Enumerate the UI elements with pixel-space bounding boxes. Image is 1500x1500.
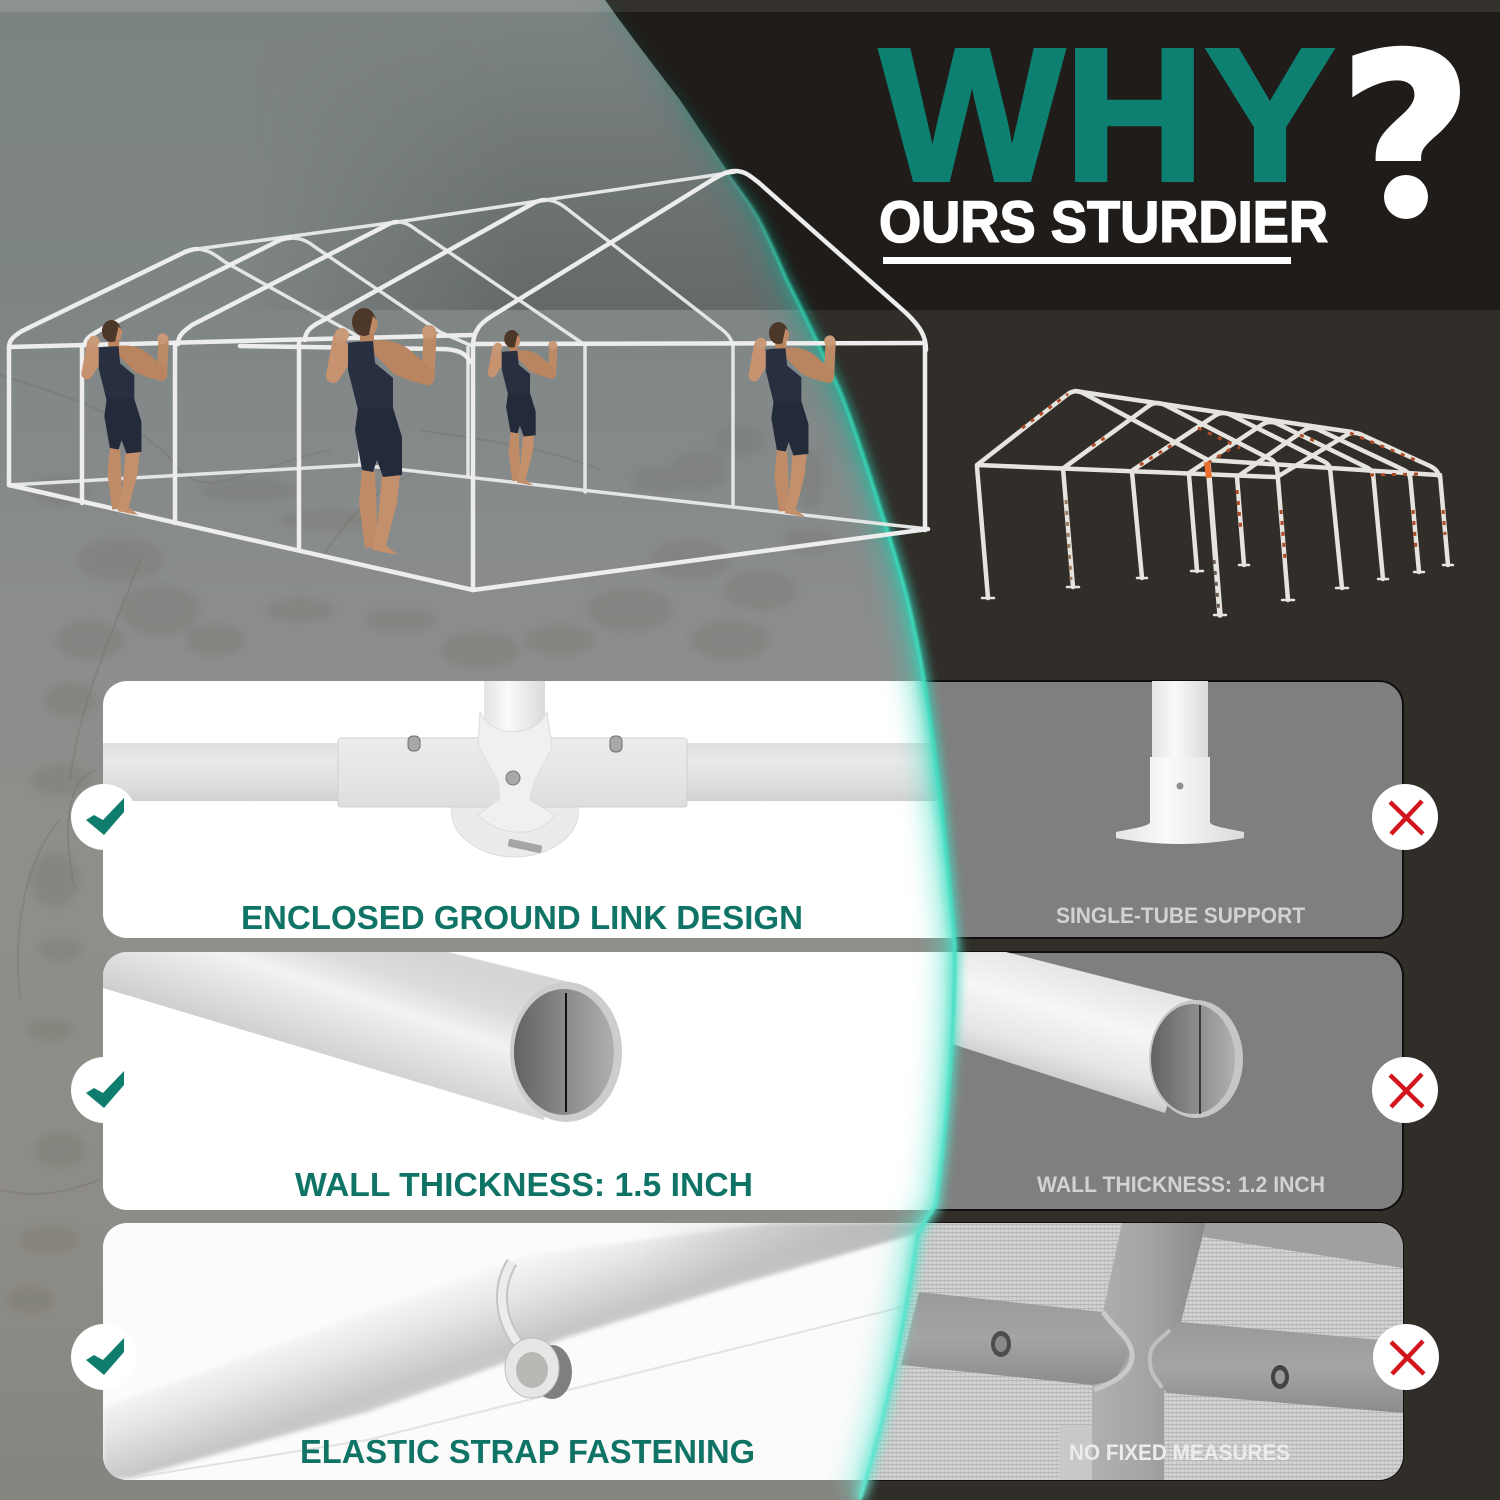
title: WHY: WHY	[880, 10, 1335, 221]
thin-wall tube photo	[940, 952, 1243, 1118]
man 2	[333, 308, 436, 555]
subtitle: OURS STURDIER: OURS STURDIER	[879, 190, 1328, 255]
elastic strap	[502, 1262, 524, 1350]
T fitting	[478, 712, 555, 832]
label: elastic strap fastening: ELASTIC STRAP FASTENING	[300, 1433, 755, 1470]
background: grey photo left side	[0, 0, 1000, 1500]
horizontal tube	[103, 743, 1003, 801]
icon: check row 3	[71, 1324, 137, 1390]
rusty competitor tent frame	[977, 391, 1453, 615]
rear frame tubes	[9, 172, 928, 529]
icon: check row 1	[71, 784, 137, 850]
teal glow curve	[605, 0, 955, 1500]
floor flange	[452, 807, 578, 857]
panel row 1: single-tube comparison (grey side)	[926, 680, 1404, 939]
label: enclosed ground link: ENCLOSED GROUND LINK DESIGN	[241, 899, 803, 936]
pole	[103, 1223, 940, 1480]
single tube support photo	[1116, 681, 1244, 844]
icon: cross row 2	[1372, 1057, 1438, 1123]
foliage texture	[6, 424, 836, 1314]
label: no fixed measures: NO FIXED MEASURES	[1069, 1440, 1290, 1465]
label: wall thickness 1.5 inch: WALL THICKNESS: 1.5 INCH	[295, 1166, 753, 1203]
white tent frame with men hanging	[9, 171, 928, 590]
rust spots	[1022, 394, 1445, 612]
icon: cross row 1	[1372, 784, 1438, 850]
man 3	[492, 330, 557, 486]
title: question mark: ?	[1339, 7, 1472, 274]
vertical tube	[484, 681, 545, 731]
welded joint photo	[860, 1223, 1405, 1480]
panel row 1: white side with enclosed ground link	[103, 681, 1003, 938]
icon: check row 2	[71, 1057, 137, 1123]
man 4	[754, 322, 835, 517]
front frame tubes	[9, 171, 928, 590]
frame tubes	[977, 391, 1453, 615]
label: wall thickness 1.2 inch: WALL THICKNESS: 1.2 INCH	[1037, 1172, 1325, 1197]
strap highlight	[502, 1262, 524, 1350]
label: single-tube support: SINGLE-TUBE SUPPORT	[1056, 903, 1306, 928]
panel row 3: white side with elastic strap	[103, 1223, 1003, 1480]
connector sleeve	[338, 738, 687, 807]
panel row 3: no fixed measures (grey side)	[866, 1222, 1404, 1481]
man 1	[87, 320, 168, 515]
subtitle underline	[883, 257, 1291, 264]
icon: cross row 3	[1373, 1324, 1439, 1390]
bolts	[408, 736, 622, 853]
panel row 2: white side with thick wall tube	[103, 952, 1003, 1210]
eyelet	[505, 1338, 572, 1399]
panel row 2: thin wall comparison (grey side)	[935, 951, 1404, 1211]
fabric seam	[131, 1300, 930, 1478]
